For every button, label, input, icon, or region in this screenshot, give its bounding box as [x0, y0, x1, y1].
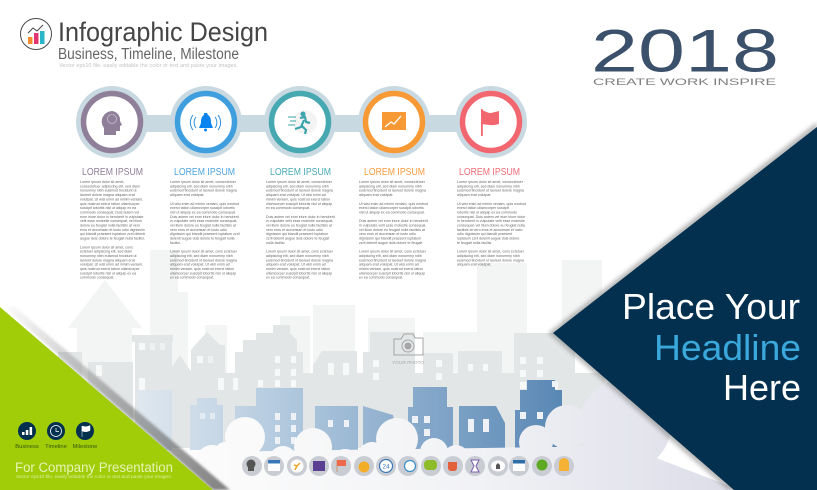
column 2 text: Ut wisi enim ad minim veniam, quis nostrud	[170, 202, 239, 206]
headline: Here	[723, 367, 801, 408]
illustration: city skyline	[58, 250, 605, 453]
column 1 text: commodo consequat.	[80, 276, 114, 280]
logo badge	[20, 18, 52, 50]
column 5 heading: LOREM IPSUM	[459, 167, 520, 178]
column 1 heading: LOREM IPSUM	[82, 167, 143, 178]
column 1 text: ectetuer adipiscing elit, sed diam	[80, 250, 132, 254]
column 3 text: Lorem ipsum dolor sit amet, cons ectetuer	[266, 250, 334, 254]
column 2 text: facilisi.	[170, 241, 181, 245]
column 5 text: adipiscing elit, sed diam nonummy nibh	[457, 184, 520, 188]
column 5 text: euismod tincidunt ut laoreet dolore magna	[457, 258, 524, 262]
column 3 text: vero eros et accumsan et iusto odio	[266, 228, 323, 232]
panel: green corner	[0, 307, 213, 490]
column 3 text: ex ea commodo consequat.	[266, 206, 310, 210]
column 3 text: euismod tincidunt ut laoreet dolore magna	[266, 258, 333, 262]
icon: camera placeholder: YOUR PHOTO	[392, 360, 425, 365]
column 3 text: vel illum dolore eu feugiat nulla facilisis at	[266, 224, 332, 228]
column 2 text: adipiscing elit, sed diam nonummy nibh	[170, 184, 233, 188]
column 4 text: minim veniam, quis nostrud exerci tation	[359, 267, 423, 271]
column 4 text: Ut wisi enim ad minim veniam, quis nostrud	[359, 202, 428, 206]
column 4 text: zzril delenit augue duis dolore te feugait	[359, 241, 422, 245]
column 3 text: minim veniam, quis nostrud exerci tation	[266, 197, 330, 201]
panel: navy headline	[553, 127, 817, 490]
column 1 text: suscipit lobortis nisl ut aliquip ex ea	[80, 206, 136, 210]
column 5 text: aliquam erat volutpat.	[457, 193, 491, 197]
column 4 text: euismod tincidunt ut laoreet dolore magna	[359, 258, 426, 262]
footer caption: Vector eps10 file, easily editable the color or text and paste your images.	[16, 474, 172, 479]
column 3 text: in vulputate velit esse molestie consequat,	[266, 219, 333, 223]
column 2 text: euismod tincidunt ut laoreet dolore magna	[170, 189, 237, 193]
column 5 text: odio dignissim qui blandit praesent	[457, 232, 512, 236]
column 3 text: Duis autem vel eum iriure dolor in hendrerit	[266, 215, 335, 219]
headline: Headline	[654, 327, 801, 368]
shadow: green corner fold	[6, 306, 230, 490]
column 1 text: augue duis dolore te feugait nulla facilisi.	[80, 237, 145, 241]
column 1 text: qui blandit praesent luptatum zzril delenit	[80, 232, 145, 236]
tagline: CREATE WORK INSPIRE	[593, 77, 776, 88]
column 4 text: Duis autem vel eum iriure dolor in hendrerit	[359, 219, 428, 223]
column 5 text: Lorem ipsum dolor sit amet, cons ectetuer	[457, 250, 525, 254]
column 3 text: aliquam erat volutpat. Ut wisi enim ad	[266, 193, 326, 197]
column 1 text: eros et accumsan et iusto odio dignissim	[80, 228, 145, 232]
column 2 text: Lorem ipsum dolor sit amet, consectetuer	[170, 180, 237, 184]
column 4 text: vel illum dolore eu feugiat nulla facilisis at	[359, 228, 425, 232]
headline: Place Your	[622, 286, 800, 327]
column 5 text: aliquam erat volutpat.	[457, 263, 491, 267]
step 3: runner icon	[272, 94, 328, 150]
clouds and lower panel	[196, 379, 740, 490]
column 2 text: aliquam erat volutpat. Ut wisi enim ad	[170, 263, 230, 267]
column 1 text: nonummy nibh euismod tincidunt ut	[80, 254, 137, 258]
column 1 text: quis nostrud exerci tation ullamcorper	[80, 202, 141, 206]
icon: timeline	[45, 422, 67, 450]
column 4 text: adipiscing elit, sed diam nonummy nibh	[359, 184, 422, 188]
column 4 text: ullamcorper suscipit lobortis nisl ut aliquip	[359, 271, 425, 275]
column 3 text: Lorem ipsum dolor sit amet, consectetuer	[266, 180, 333, 184]
column 3 text: adipiscing elit, sed diam nonummy nibh	[266, 184, 329, 188]
column 5 text: euismod tincidunt ut laoreet dolore magna	[457, 189, 524, 193]
headline	[622, 286, 801, 408]
column 3 text: ullamcorper suscipit lobortis nisl ut aliquip	[266, 271, 332, 275]
year: 2018	[591, 18, 779, 84]
icon: milestone: Milestone	[73, 444, 97, 450]
caption: Vector eps10 file, easily editable the color or text and paste your images.	[59, 63, 238, 69]
building windows	[96, 343, 558, 390]
column 1 text: commodo consequat. Duis autem vel	[80, 210, 139, 214]
column 1 text: consectetuer adipiscing elit, sed diam	[80, 184, 140, 188]
column 4 text: exerci tation ullamcorper suscipit lobortis	[359, 206, 424, 210]
icon: camera placeholder	[392, 334, 425, 365]
column 4 text: aliquam erat volutpat.	[359, 193, 393, 197]
icon: timeline: Timeline	[45, 444, 67, 450]
column 5 text: exerci tation ullamcorper suscipit	[457, 206, 509, 210]
column 4 heading: LOREM IPSUM	[364, 167, 425, 178]
column 3 text: zzril delenit augue duis dolore te feugait	[266, 237, 329, 241]
subtitle: Business, Timeline, Milestone	[58, 46, 239, 63]
column 3 heading: LOREM IPSUM	[270, 167, 331, 178]
footer heading: For Company Presentation	[15, 460, 173, 475]
column 2 text: adipiscing elit, sed diam nonummy nibh	[170, 254, 233, 258]
step 4: chart icon	[366, 94, 422, 150]
column 2 text: aliquam erat volutpat.	[170, 193, 204, 197]
column 3 text: euismod tincidunt ut laoreet dolore magna	[266, 189, 333, 193]
column 2 text: in vulputate velit esse molestie consequat,	[170, 219, 237, 223]
icon row	[242, 456, 574, 476]
column 2 text: nisl ut aliquip ex ea commodo consequat.	[170, 210, 236, 214]
column 5 text: consequat, vel illum dolore eu feugiat nulla	[457, 224, 525, 228]
column 1 text: dolore eu feugiat nulla facilisis at vero	[80, 224, 140, 228]
column 4 text: ex ea commodo consequat.	[359, 276, 403, 280]
column 1 text: Lorem ipsum dolor sit amet,	[80, 180, 124, 184]
column 1 text: velit esse molestie consequat, vel illum	[80, 219, 142, 223]
column 1 text: volutpat. Ut wisi enim ad minim veniam,	[80, 263, 143, 267]
column 5 text: in hendrerit in vulputate velit esse molestie	[457, 219, 525, 223]
column 2 text: minim veniam, quis nostrud exerci tation	[170, 267, 234, 271]
column 2 text: vel illum dolore eu feugiat nulla facilisis at	[170, 224, 236, 228]
column 1 text: quis nostrud exerci tation ullamcorper	[80, 267, 141, 271]
column 5 text: adipiscing elit, sed diam nonummy nibh	[457, 254, 520, 258]
icon row: 24	[382, 464, 390, 470]
column 3 text: nulla facilisi.	[266, 241, 285, 245]
column 2 text: ex ea commodo consequat.	[170, 276, 214, 280]
column 2 text: ullamcorper suscipit lobortis nisl ut aliquip	[170, 271, 236, 275]
column 4 text: vero eros et accumsan et iusto odio	[359, 232, 416, 236]
title: Infographic Design	[58, 17, 268, 47]
column 5 text: facilisis at vero eros et accumsan et iusto	[457, 228, 523, 232]
mid-tone buildings	[58, 325, 605, 448]
icon: business	[15, 422, 39, 450]
column 1 text: suscipit lobortis nisl ut aliquip ex ea	[80, 271, 136, 275]
column 3 text: ex ea commodo consequat.	[266, 276, 310, 280]
column 2 text: vero eros et accumsan et iusto odio	[170, 228, 227, 232]
column 5 text: consequat. Duis autem vel eum iriure dolor	[457, 215, 526, 219]
step 5: flag icon	[462, 94, 520, 150]
column 1 text: nonummy nibh euismod tincidunt ut	[80, 189, 137, 193]
step 1: head icon	[84, 94, 140, 150]
column 5 text: luptatum zzril delenit augue duis dolore	[457, 237, 519, 241]
blue building windows	[200, 381, 557, 444]
column 2 text: Lorem ipsum dolor sit amet, cons ectetuer	[170, 250, 238, 254]
background towers and arrow	[68, 250, 602, 400]
column 2 text: euismod tincidunt ut laoreet dolore magna	[170, 258, 237, 262]
column 3 text: minim veniam, quis nostrud exerci tation	[266, 267, 330, 271]
column 4 text: adipiscing elit, sed diam nonummy nibh	[359, 254, 422, 258]
column 1 text: laoreet dolore magna aliquam erat	[80, 193, 135, 197]
column 2 heading: LOREM IPSUM	[174, 167, 235, 178]
column 2 text: Duis autem vel eum iriure dolor in hendrerit	[170, 215, 239, 219]
column 3 text: ullamcorper suscipit lobortis nisl ut aliquip	[266, 202, 332, 206]
column 4 text: in vulputate velit esse molestie consequat,	[359, 224, 426, 228]
column 5 text: te feugait nulla facilisi.	[457, 241, 492, 245]
column 3 text: aliquam erat volutpat. Ut wisi enim ad	[266, 263, 326, 267]
column 4 text: Lorem ipsum dolor sit amet, cons ectetuer	[359, 250, 427, 254]
timeline track	[76, 86, 527, 158]
column 1 text: eum iriure dolor in hendrerit in vulputate	[80, 215, 143, 219]
column 4 text: Lorem ipsum dolor sit amet, consectetuer	[359, 180, 426, 184]
icon: milestone	[73, 422, 97, 450]
column 3 text: adipiscing elit, sed diam nonummy nibh	[266, 254, 329, 258]
column 4 text: aliquam erat volutpat. Ut wisi enim ad	[359, 263, 419, 267]
shadow: navy panel	[548, 122, 817, 490]
column 5 text: Ut wisi enim ad minim veniam, quis nostrud	[457, 202, 526, 206]
column 4 text: nisl ut aliquip ex ea commodo consequat.	[359, 210, 425, 214]
column 1 text: volutpat. Ut wisi enim ad minim veniam,	[80, 197, 143, 201]
column 2 text: dignissim qui blandit praesent luptatum zzril	[170, 232, 240, 236]
icon: business: Business	[15, 444, 39, 450]
column 3 text: dignissim qui blandit praesent luptatum	[266, 232, 328, 236]
blue foreground buildings	[137, 380, 565, 453]
column 2 text: delenit augue duis dolore te feugait nulla	[170, 237, 235, 241]
column 4 text: dignissim qui blandit praesent luptatum	[359, 237, 421, 241]
column 5 text: lobortis nisl ut aliquip ex ea commodo	[457, 210, 517, 214]
column 1 text: laoreet dolore magna aliquam erat	[80, 258, 135, 262]
column 4 text: euismod tincidunt ut laoreet dolore magna	[359, 189, 426, 193]
column 2 text: exerci tation ullamcorper suscipit lobortis	[170, 206, 235, 210]
column 1 text: Lorem ipsum dolor sit amet, cons	[80, 245, 133, 249]
step 2: bell icon	[178, 94, 234, 150]
column 5 text: Lorem ipsum dolor sit amet, consectetuer	[457, 180, 524, 184]
